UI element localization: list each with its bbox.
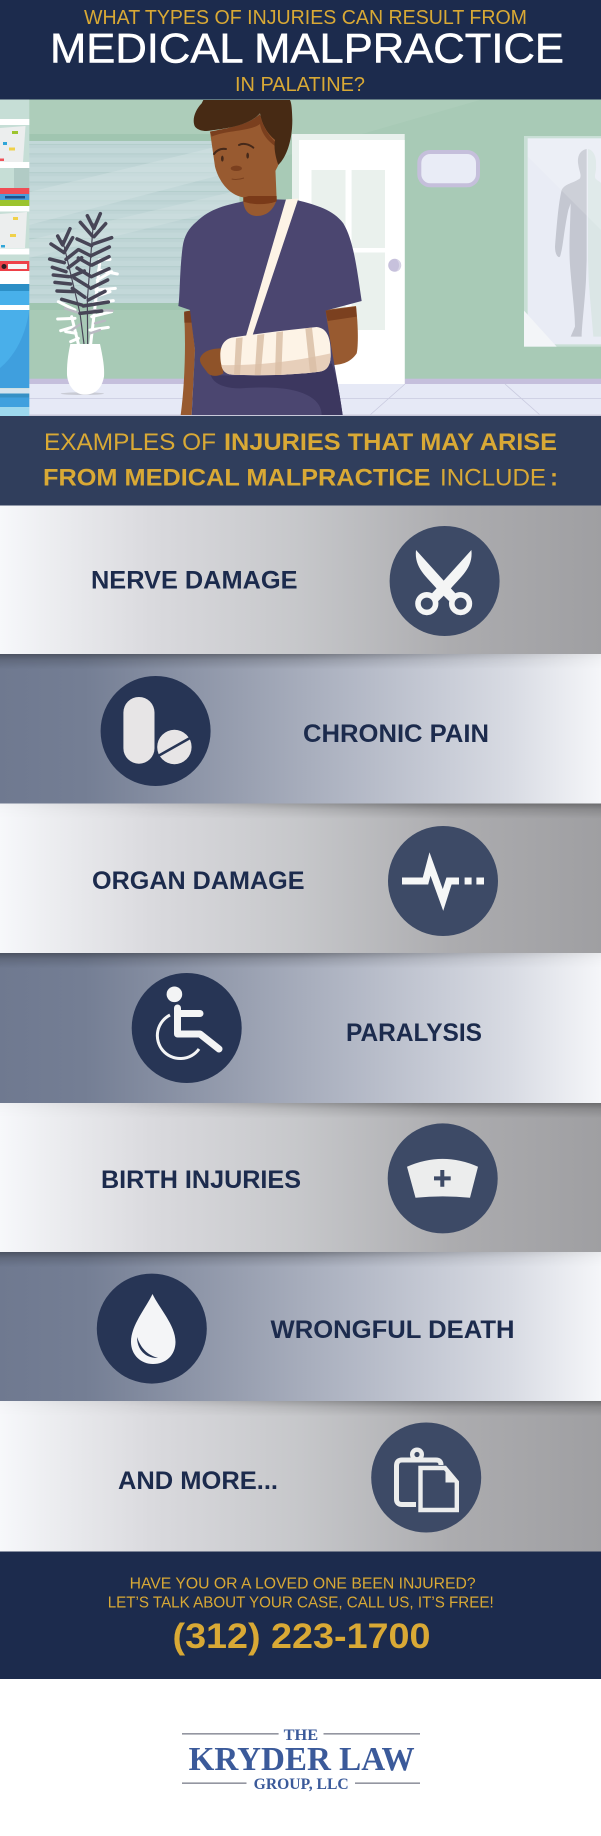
row: organ damage [0,804,601,954]
window blinds [29,134,240,310]
door [292,134,405,384]
icon: nurse cap [388,1123,498,1233]
label: and more: AND MORE... [118,1467,278,1495]
panel: illustration of injured man in clinic [0,100,601,416]
injured man with arm in sling [178,100,362,415]
row: nerve damage [0,506,601,654]
logo: The Kryder Law Group [182,1727,420,1793]
icon: clipboard and document [371,1422,481,1532]
label: paralysis: PARALYSIS [346,1019,482,1047]
row: paralysis [0,953,601,1103]
heading: in Palatine: IN PALATINE? [235,74,365,96]
heading: medical malpractice: MEDICAL MALPRACTICE [50,24,564,72]
floor [29,379,601,416]
label: birth injuries: BIRTH INJURIES [101,1166,301,1194]
icon: wheelchair [132,973,242,1083]
icon: blood drop [97,1274,207,1384]
row: birth injuries [0,1103,601,1252]
row: chronic pain [0,654,601,804]
wall [29,100,601,380]
wall sign [419,152,478,185]
text: phone number: (312) 223-1700 [172,1617,430,1656]
panel: header [0,0,601,100]
label: nerve damage: NERVE DAMAGE [91,566,298,594]
logo: The Kryder Law Group: KRYDER LAW [189,1741,415,1778]
heading line 1: EXAMPLES OF [44,429,216,456]
plant in white pot [50,214,117,395]
icon: pills [101,676,211,786]
heading line 2: FROM MEDICAL MALPRACTICE [43,464,430,492]
anatomy poster [524,136,601,347]
label: organ damage: ORGAN DAMAGE [92,867,304,895]
medical shelves [0,100,29,416]
logo: The Kryder Law Group: THE [284,1727,318,1744]
heading line 1 [44,429,557,456]
panel: footer call to action [0,1552,601,1679]
label: chronic pain: CHRONIC PAIN [303,720,489,748]
logo: The Kryder Law Group: GROUP, LLC [254,1776,349,1793]
heading: question intro: WHAT TYPES OF INJURIES CAN RESULT FROM [84,7,527,29]
row: wrongful death [0,1252,601,1402]
label: wrongful death: WRONGFUL DEATH [270,1316,514,1344]
heading line 1: INJURIES THAT MAY ARISE [224,429,557,456]
panel: examples heading band [0,416,601,506]
icon: scissors [390,526,500,636]
text: question line: HAVE YOU OR A LOVED ONE BEEN INJURED? [130,1576,476,1592]
text: call prompt: LET’S TALK ABOUT YOUR CASE, CALL US, IT’S FREE! [108,1594,494,1612]
heading line 2: : [550,464,558,492]
row: and more [0,1401,601,1552]
heading line 2: INCLUDE [440,464,546,492]
icon: heartbeat pulse [388,826,498,936]
